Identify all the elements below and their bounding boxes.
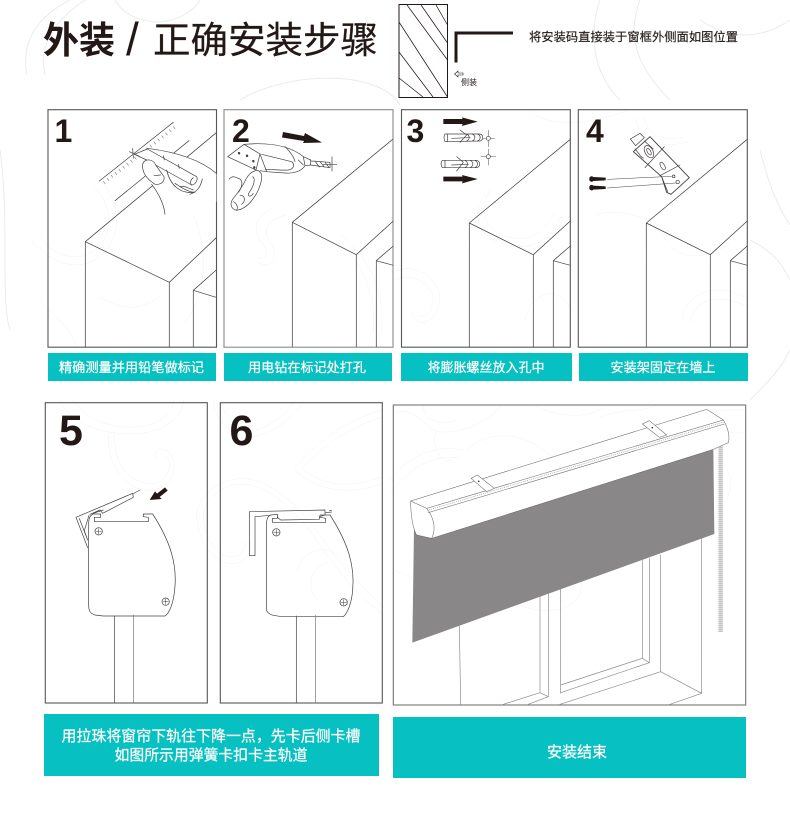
- step number 2: 2: [232, 113, 250, 149]
- title: [43, 13, 378, 65]
- panel: step 2: [224, 110, 393, 347]
- caption steps 5 and 6: [44, 714, 379, 776]
- panel: step 5: [45, 403, 207, 703]
- window corner: [85, 133, 216, 347]
- panel: step 4: [578, 110, 747, 347]
- icon: side arrow: [454, 71, 463, 77]
- hand with ruler and pencil: [99, 122, 216, 214]
- wall section diagram: [399, 4, 448, 98]
- step number 3: 3: [406, 113, 424, 149]
- caption step 4: [579, 353, 748, 381]
- arrows and wall anchors: [441, 117, 496, 183]
- window frame behind blind: [459, 538, 702, 704]
- caption step 1: 精确测量并用铅笔做标记: [59, 360, 204, 375]
- icon: mounting bracket with screws: [589, 133, 689, 194]
- title: 正确安装步骤: [153, 20, 378, 61]
- window corner: [646, 139, 747, 347]
- panel: finished roller blind: [393, 405, 746, 705]
- panel: step 6: [220, 403, 382, 703]
- headrail and brackets: [411, 409, 729, 538]
- caption step 3: [401, 353, 572, 381]
- icon: hand with drill: [228, 144, 337, 210]
- title: /: [126, 13, 139, 65]
- arrow: drill direction: [282, 132, 322, 143]
- caption step 3: 将膨胀螺丝放入孔中: [428, 360, 544, 375]
- instruction text: 将安装码直接装于窗框外侧面如图位置: [529, 29, 738, 44]
- caption finished: [393, 717, 746, 778]
- step number 1: 1: [54, 113, 72, 149]
- icon: L-shaped mounting bracket: [456, 33, 513, 62]
- caption steps 5 and 6: 如图所示用弹簧卡扣卡主轨道: [114, 747, 308, 764]
- step number 5: 5: [59, 407, 83, 455]
- title: 外装: [43, 20, 115, 61]
- cassette with clip tilted: [76, 487, 175, 703]
- blind fabric: [412, 449, 714, 643]
- panel: step 3: [402, 110, 570, 347]
- panel: step 1: [48, 110, 216, 347]
- side label: 侧装: [461, 77, 477, 87]
- caption step 1: [48, 353, 216, 381]
- pull chain: [714, 447, 727, 633]
- step number 6: 6: [230, 407, 253, 455]
- window corner: [292, 139, 393, 347]
- window corner: [469, 139, 570, 347]
- background watermark pattern: [0, 0, 790, 613]
- caption step 2: 用电钻在标记处打孔: [248, 360, 366, 375]
- caption steps 5 and 6: 用拉珠将窗帘下轨往下降一点，先卡后侧卡槽: [62, 727, 360, 745]
- step number 4: 4: [586, 113, 604, 149]
- caption finished: 安装结束: [547, 744, 607, 761]
- caption step 2: [224, 353, 392, 381]
- cassette with clip locked: [249, 510, 353, 703]
- caption step 4: 安装架固定在墙上: [610, 360, 716, 375]
